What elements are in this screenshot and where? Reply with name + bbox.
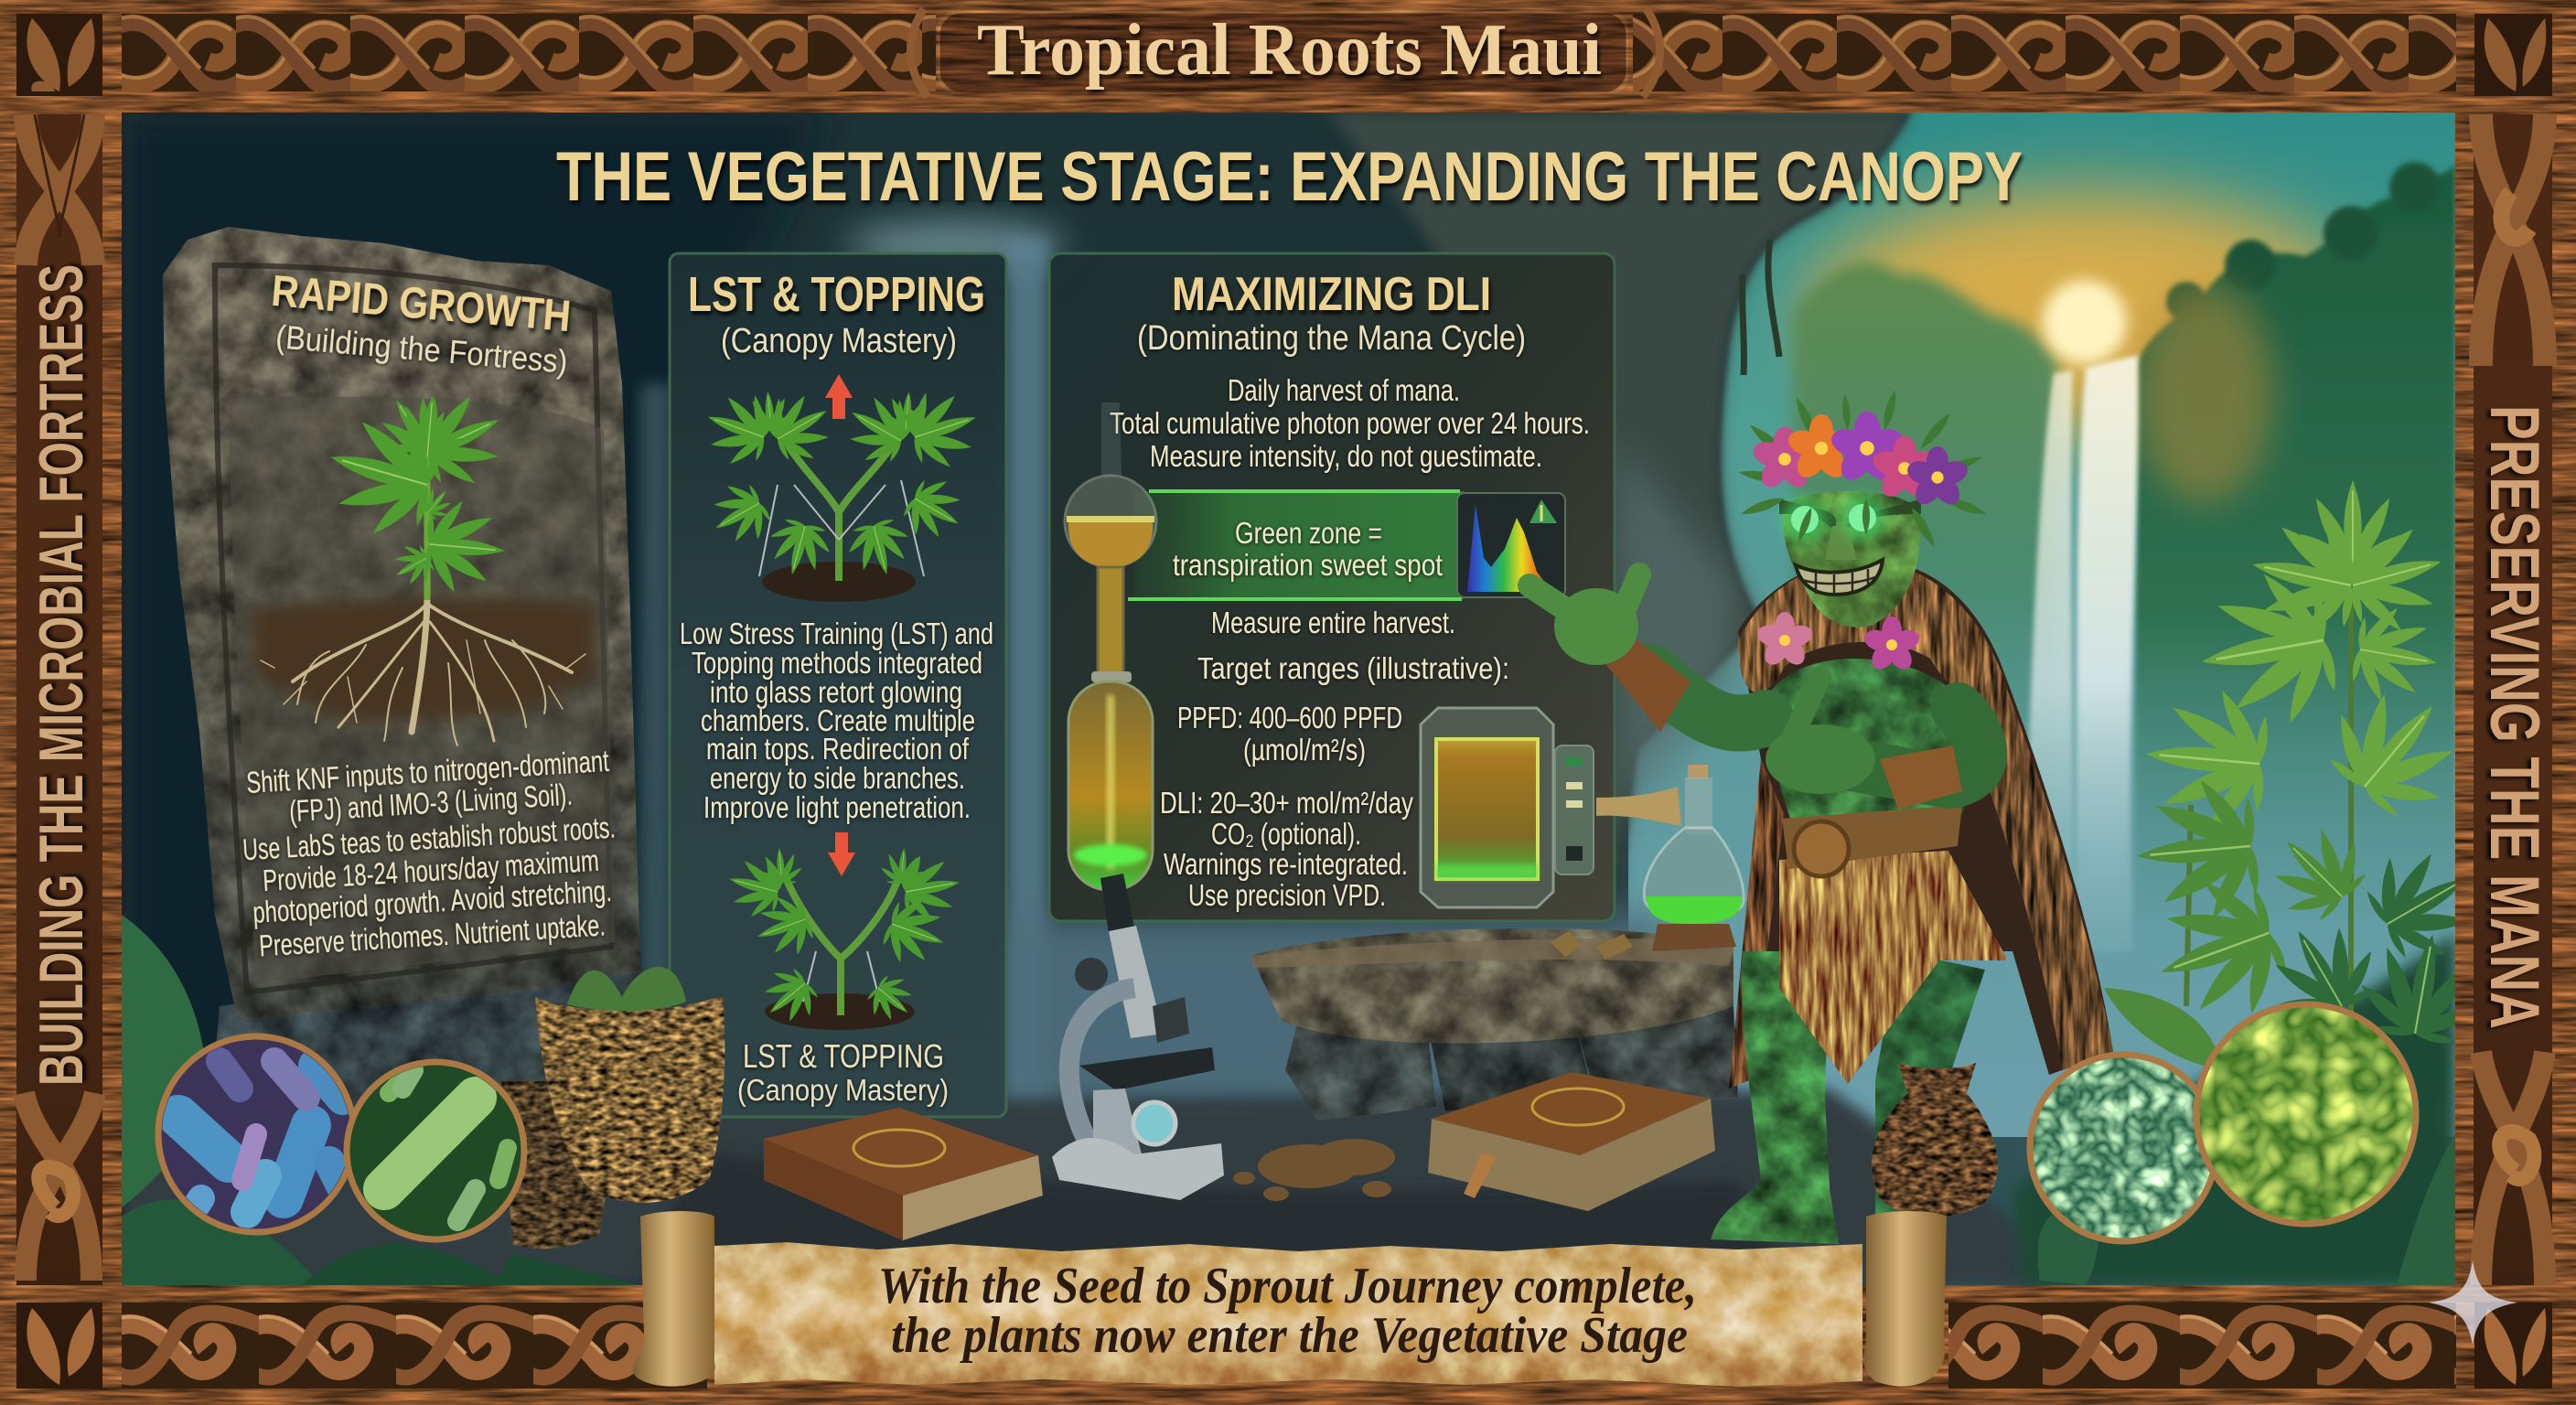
icon: leaf texture magnified large (2195, 1003, 2418, 1226)
glowing eyes (1783, 498, 1827, 542)
potion flask (1644, 765, 1744, 951)
stone slab (163, 227, 640, 1021)
tablet body text: photoperiod growth. Avoid stretching. (252, 874, 613, 929)
arm raised with shaka hand (1530, 574, 1766, 732)
pebbles on table (1551, 931, 1633, 960)
panel target ranges text: PPFD: 400–600 PPFD (1177, 701, 1402, 735)
panel target ranges text: CO₂ (optional). (1211, 817, 1361, 851)
panel subheading: (Canopy Mastery) (721, 322, 957, 360)
cloak back (1729, 558, 2113, 1089)
tablet body text: Preserve trichomes. Nutrient uptake. (258, 907, 606, 963)
tablet body text (242, 744, 617, 963)
title text: Tropical Roots Maui (977, 10, 1602, 91)
panel heading: LST & TOPPING (688, 267, 985, 322)
panel targets heading: Target ranges (illustrative): (1197, 651, 1509, 685)
callout: green zone band: transpiration sweet spot (1173, 548, 1443, 582)
panel: stone tablet rapid growth (163, 227, 659, 1189)
coffee-like seeds (1233, 1139, 1395, 1201)
panel body text: energy to side branches. (710, 761, 965, 795)
panel heading: MAXIMIZING DLI (1172, 268, 1491, 321)
green tiki warrior character (1530, 389, 2113, 1244)
book: left (764, 1108, 1043, 1240)
scroll roll left (633, 1211, 715, 1387)
glass retort with glowing liquid (1065, 402, 1156, 890)
back leg (1875, 951, 1985, 1235)
brass horn (1596, 787, 1681, 826)
icon: blue microbes magnified (158, 1036, 354, 1232)
main heading: THE VEGETATIVE STAGE: EXPANDING THE CANOPY (556, 138, 2023, 216)
icon: sparkle (2429, 1260, 2517, 1346)
stone table with rock pedestal (1251, 928, 1738, 1121)
panel target ranges text (1160, 701, 1413, 912)
panel intro text (1110, 373, 1590, 473)
belt with round buckle (1782, 805, 1962, 876)
panel subheading: (Dominating the Mana Cycle) (1137, 319, 1526, 358)
panel measure text: Measure entire harvest. (1211, 606, 1455, 639)
scroll roll right (1864, 1211, 1947, 1387)
chart: light spectrum (1457, 493, 1565, 597)
tablet body text: (FPJ) and IMO-3 (Living Soil). (288, 778, 574, 828)
plant with roots (251, 374, 595, 745)
icon: red up arrow (825, 374, 853, 419)
front leg and foot (1711, 951, 1839, 1244)
woven mug (501, 1081, 613, 1249)
stone pedestal (210, 951, 659, 1189)
panel body text (680, 617, 993, 824)
parchment scroll banner (633, 1211, 1947, 1387)
woven basket (535, 967, 724, 1203)
panel intro text: Measure intensity, do not guestimate. (1150, 439, 1542, 473)
panel: LST and topping (670, 253, 1006, 1117)
panel target ranges text: (µmol/m²/s) (1243, 733, 1366, 767)
folded arm with bracer (1766, 677, 1980, 810)
callout: green zone band: Green zone = (1235, 516, 1382, 550)
panel footer subheading: (Canopy Mastery) (737, 1073, 949, 1107)
tablet heading: RAPID GROWTH (270, 267, 573, 341)
panel intro text: Total cumulative photon power over 24 hours. (1110, 406, 1590, 440)
panel body text: Low Stress Training (LST) and (680, 617, 993, 650)
fur cloak shoulders and edge (1729, 562, 2113, 1089)
feather skirt (1779, 851, 2008, 1084)
broad leaves (122, 915, 640, 1285)
grimacing mouth (1796, 560, 1883, 595)
chamber with glowing reading (1421, 708, 1681, 907)
title plaque (910, 9, 1660, 97)
banner text line one: With the Seed to Sprout Journey complete, (878, 1258, 1697, 1314)
panel intro text: Daily harvest of mana. (1228, 373, 1460, 407)
baskets and jungle foliage lower left (122, 915, 724, 1285)
panel target ranges text: Warnings re-integrated. (1164, 847, 1408, 881)
panel footer heading: LST & TOPPING (743, 1037, 944, 1075)
panel body text: Improve light penetration. (703, 790, 971, 824)
icon: red down arrow (828, 832, 855, 876)
panel target ranges text: Use precision VPD. (1188, 878, 1386, 912)
tablet body text: Provide 18-24 hours/day maximum (262, 843, 600, 897)
panel body text: main tops. Redirection of (706, 732, 970, 766)
panel body text: into glass retort glowing (710, 675, 962, 709)
neck flowers (1755, 612, 1922, 674)
panel body text: Topping methods integrated (692, 646, 982, 680)
panel target ranges text: DLI: 20–30+ mol/m²/day (1160, 786, 1413, 820)
microscope (1052, 874, 1224, 1200)
panel: maximizing DLI (1049, 253, 1615, 921)
banner text line two: the plants now enter the Vegetative Stage (891, 1307, 1688, 1364)
flower crown (1738, 389, 1989, 550)
icon: leaf texture magnified small (2028, 1053, 2218, 1243)
head (1779, 491, 1921, 627)
tablet body text: Shift KNF inputs to nitrogen-dominant (245, 744, 610, 799)
plant with low stress training (721, 846, 966, 1035)
woven vase (1872, 1063, 1998, 1217)
open books and seeds on the floor (764, 1072, 1715, 1240)
tablet subheading: (Building the Fortress) (274, 317, 569, 381)
scene background: cave, sky, waterfall and jungle (122, 113, 2455, 1285)
torso (1766, 659, 1973, 828)
right side banner text: PRESERVING THE MANA (2475, 405, 2553, 1029)
icon: green bacterium magnified (347, 1062, 524, 1239)
jungle plants right (2012, 480, 2496, 1285)
book: right (1428, 1072, 1715, 1211)
tablet body text: Use LabS teas to establish robust roots. (242, 810, 617, 866)
callout: green zone band (1128, 489, 1464, 601)
panel body text: chambers. Create multiple (701, 703, 975, 737)
plant with topped double canopy (694, 378, 989, 602)
